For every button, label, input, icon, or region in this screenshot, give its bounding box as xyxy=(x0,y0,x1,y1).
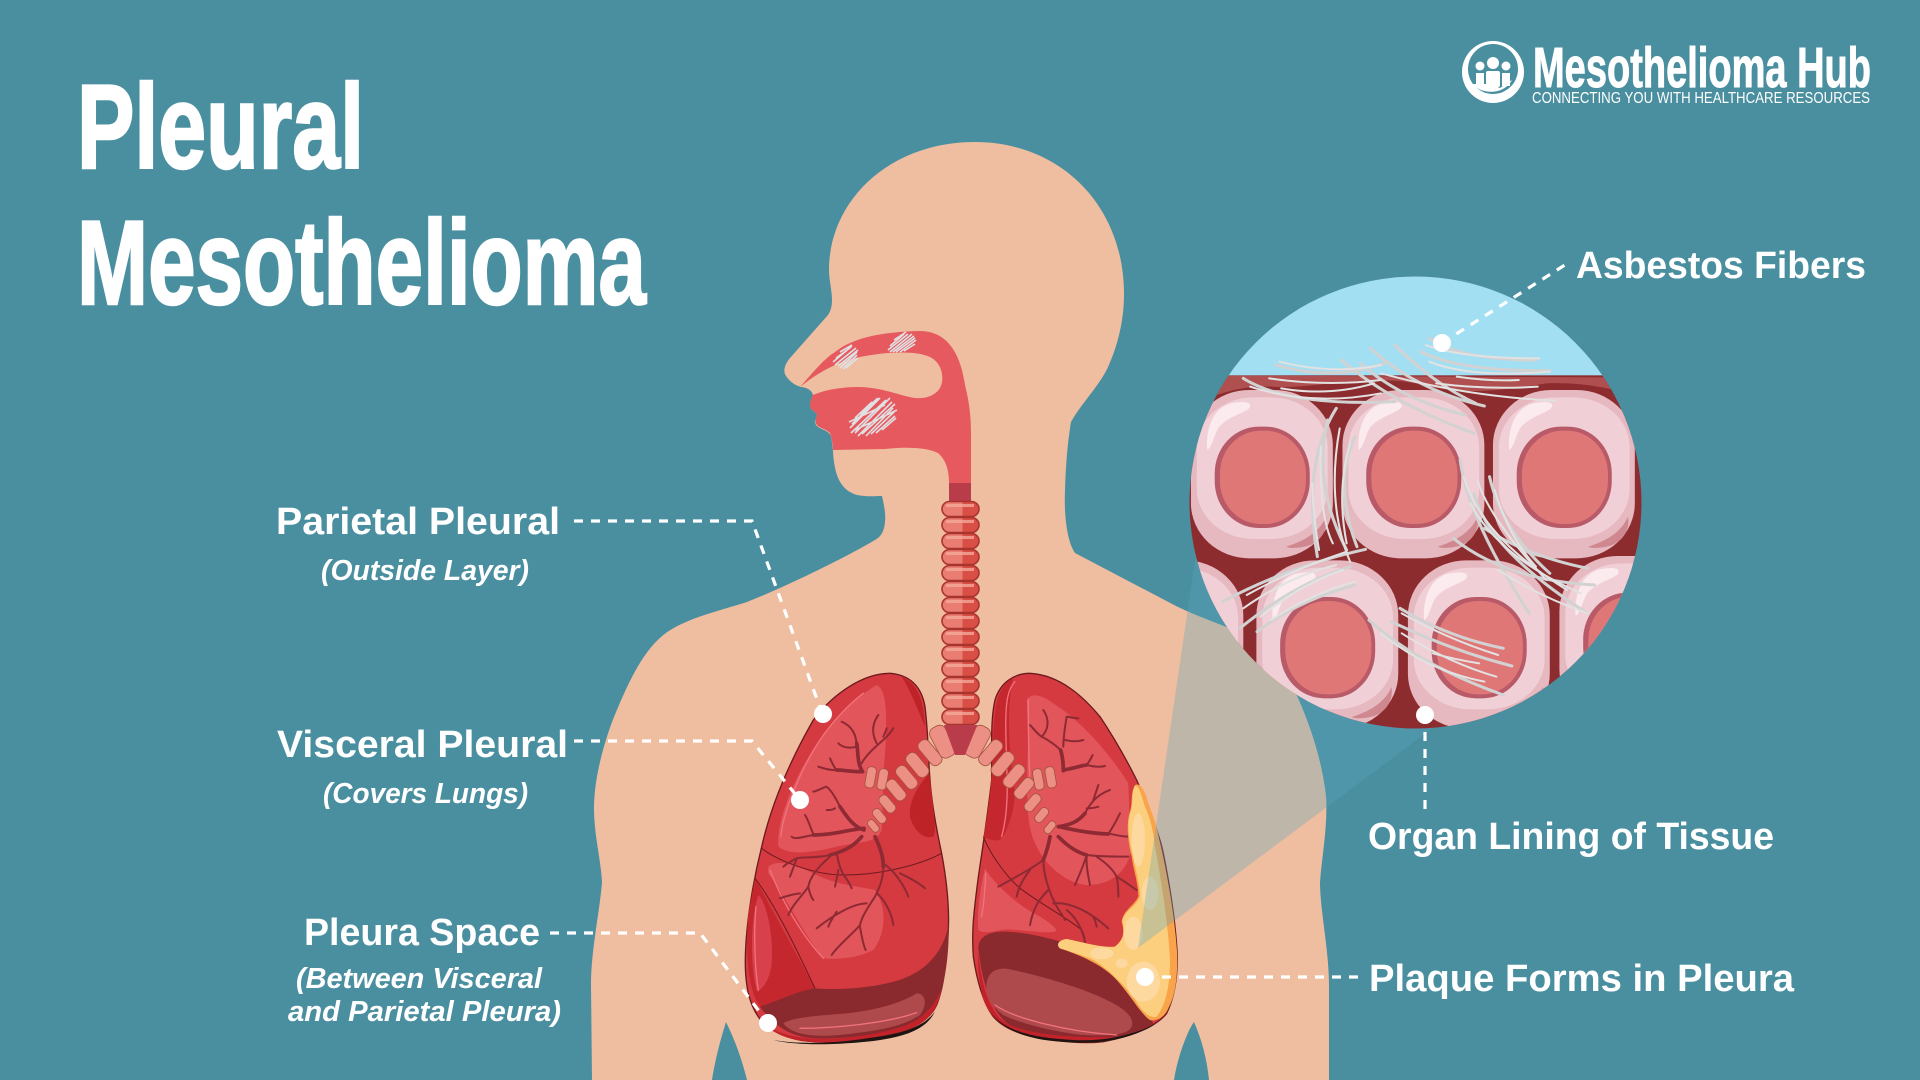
label: Parietal Pleural xyxy=(276,501,560,587)
title: Mesothelioma xyxy=(77,196,647,330)
left lung vessels xyxy=(780,715,925,955)
label: Organ Lining of Tissue: Organ Lining of Tissue xyxy=(1368,816,1774,858)
tissue base xyxy=(1174,375,1657,742)
trachea xyxy=(942,483,979,724)
leader line: Organ Lining xyxy=(1423,715,1427,812)
label: Visceral Pleural: Visceral Pleural xyxy=(277,724,568,766)
sky above tissue xyxy=(1228,276,1603,376)
label: Pleura Space xyxy=(288,912,561,1028)
label: Pleura Space: Pleura Space xyxy=(304,912,540,954)
leader line: Asbestos Fibers xyxy=(1442,263,1568,343)
lungs xyxy=(745,673,1177,1044)
label: Pleura Space: and Parietal Pleura) xyxy=(288,996,561,1028)
magnifying beam xyxy=(1138,547,1500,948)
left lung xyxy=(745,673,958,1044)
left bronchus xyxy=(864,723,958,834)
label: Parietal Pleural: Parietal Pleural xyxy=(276,501,560,543)
right lung xyxy=(944,673,1177,1043)
epithelial cells xyxy=(1101,390,1701,729)
label: Parietal Pleural: (Outside Layer) xyxy=(321,555,529,587)
carina xyxy=(944,725,977,755)
leader line: Parietal Pleural xyxy=(574,521,822,713)
title xyxy=(77,60,647,330)
right bronchus xyxy=(962,723,1057,835)
plaque xyxy=(1058,784,1177,1020)
body silhouette xyxy=(591,142,1329,1080)
magnified tissue circle xyxy=(1101,263,1701,742)
asbestos patches in airway xyxy=(833,332,916,436)
logo xyxy=(1462,36,1871,107)
asbestos fibers in tissue xyxy=(1223,338,1595,695)
marker dots xyxy=(759,334,1451,1032)
leader line: Pleura Space xyxy=(550,933,768,1023)
label: Visceral Pleural xyxy=(277,724,568,810)
label: Pleura Space: (Between Visceral xyxy=(296,963,543,995)
leader line: Plaque xyxy=(1145,975,1362,979)
tissue surface band xyxy=(1216,376,1611,395)
airway: nasal and oral cavity xyxy=(800,331,971,483)
right lung vessels xyxy=(998,710,1137,942)
label: Plaque Forms in Pleura: Plaque Forms in Pleura xyxy=(1369,958,1795,1000)
leader line: Visceral Pleural xyxy=(574,741,800,800)
label: Visceral Pleural: (Covers Lungs) xyxy=(323,778,528,810)
label: Asbestos Fibers: Asbestos Fibers xyxy=(1576,245,1866,287)
title: Pleural xyxy=(77,60,364,194)
